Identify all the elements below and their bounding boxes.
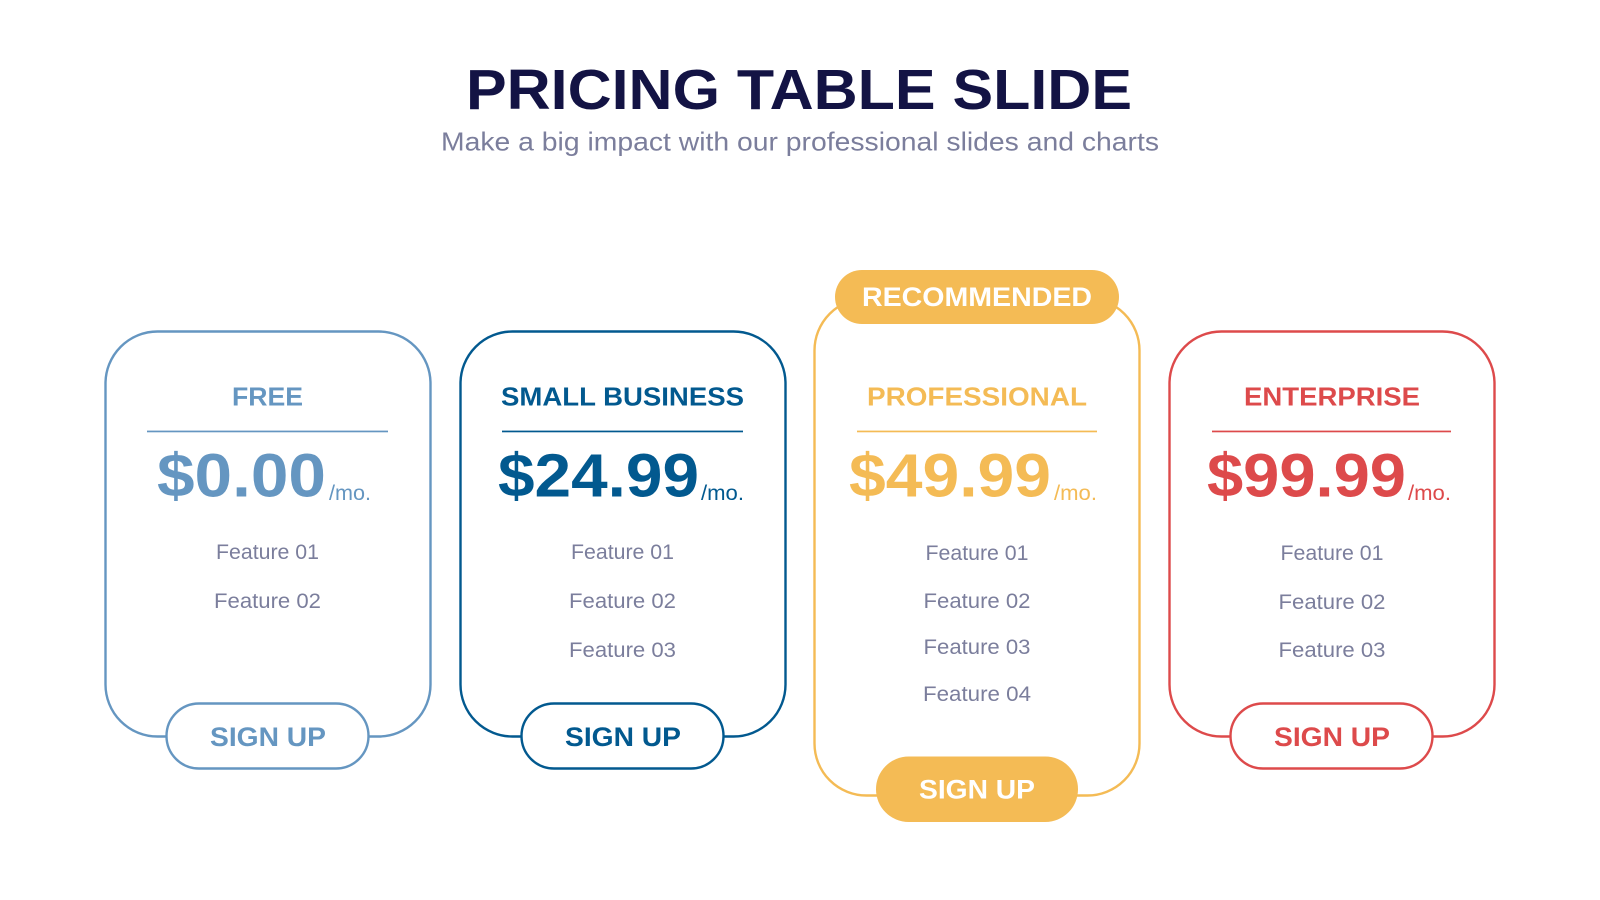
panel: free plan xyxy=(106,332,430,768)
price unit: enterprise: /mo. xyxy=(1408,482,1451,505)
features: enterprise: Feature 03 xyxy=(1278,639,1386,662)
panel: small business plan xyxy=(460,332,786,768)
divider: enterprise xyxy=(1212,431,1451,432)
card outline: free xyxy=(106,332,430,736)
features: small business: Feature 01 xyxy=(571,541,674,564)
button: enterprise sign up xyxy=(1230,704,1432,768)
features: professional: Feature 03 xyxy=(924,636,1030,659)
features: professional: Feature 02 xyxy=(924,590,1030,613)
plan name: small business: SMALL BUSINESS xyxy=(501,382,744,412)
subtitle: Make a big impact with our professional slides and charts xyxy=(441,126,1159,156)
features: professional: Feature 04 xyxy=(923,683,1031,706)
features: free xyxy=(214,541,321,613)
button: free sign up xyxy=(166,704,368,768)
price: professional: $49.99 xyxy=(849,442,1051,510)
price unit: small business: /mo. xyxy=(701,482,744,505)
price unit: professional: /mo. xyxy=(1054,482,1097,505)
features: small business xyxy=(569,541,676,662)
button: enterprise sign up: SIGN UP xyxy=(1274,722,1390,752)
features: small business: Feature 02 xyxy=(569,590,676,613)
features: professional: Feature 01 xyxy=(926,542,1028,565)
plan name: professional: PROFESSIONAL xyxy=(867,382,1087,412)
button: small business sign up xyxy=(522,704,724,768)
panel: professional plan xyxy=(814,270,1140,822)
badge: recommended: RECOMMENDED xyxy=(862,282,1092,312)
button: free sign up: SIGN UP xyxy=(210,722,326,752)
badge: recommended xyxy=(835,270,1119,324)
features: enterprise: Feature 02 xyxy=(1278,591,1386,614)
title: PRICING TABLE SLIDE xyxy=(466,58,1132,122)
price: free: $0.00 xyxy=(157,442,326,510)
price: small business: $24.99 xyxy=(498,442,699,510)
price: enterprise: $99.99 xyxy=(1207,442,1406,510)
button: small business sign up: SIGN UP xyxy=(565,722,681,752)
plan name: enterprise: ENTERPRISE xyxy=(1244,382,1420,412)
features: professional xyxy=(923,542,1031,706)
features: free: Feature 01 xyxy=(216,541,319,564)
divider: professional xyxy=(857,431,1097,432)
features: free: Feature 02 xyxy=(214,590,321,613)
divider: small business xyxy=(502,431,743,432)
features: enterprise xyxy=(1278,542,1386,662)
button: professional sign up xyxy=(876,756,1078,822)
features: small business: Feature 03 xyxy=(569,639,676,662)
card outline: professional xyxy=(814,298,1140,796)
button: professional sign up: SIGN UP xyxy=(919,774,1035,804)
card outline: small business xyxy=(460,332,786,736)
features: enterprise: Feature 01 xyxy=(1280,542,1384,565)
card outline: enterprise xyxy=(1170,332,1494,736)
plan name: free: FREE xyxy=(232,382,303,412)
panel: enterprise plan xyxy=(1170,332,1494,768)
price unit: free: /mo. xyxy=(329,482,371,505)
divider: free xyxy=(147,431,388,432)
